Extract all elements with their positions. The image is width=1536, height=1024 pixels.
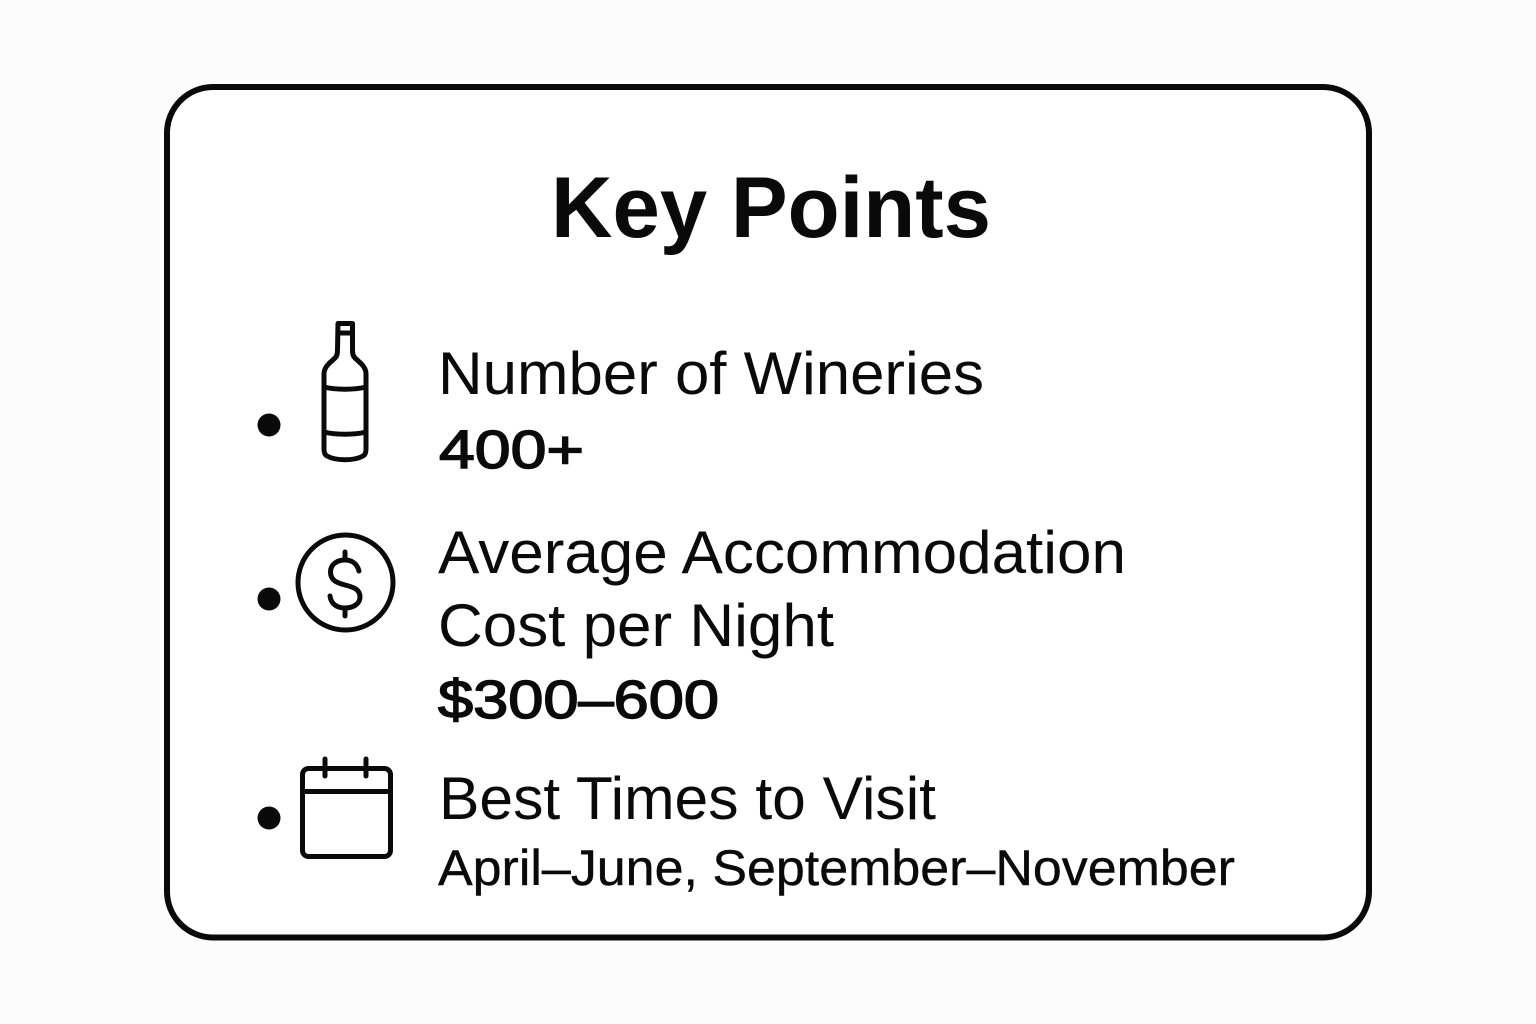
value: 400+: 400+	[439, 420, 584, 480]
item: accommodation cost	[258, 519, 1126, 730]
bullet: cost	[258, 588, 280, 610]
bullet: best times	[258, 806, 280, 830]
label: best times to visit: Best Times to Visit	[439, 765, 936, 832]
item: accommodation cost: Cost per Night	[438, 592, 834, 659]
icon: calendar	[302, 759, 390, 856]
label: number of wineries: Number of Wineries	[438, 340, 984, 407]
icon: wine bottle	[324, 324, 366, 460]
panel: key points card	[167, 87, 1369, 938]
label: average accommodation cost: Average Accommodation	[438, 519, 1126, 586]
icon: dollar coin	[298, 535, 393, 630]
value: months: April–June, September–November	[438, 840, 1235, 896]
item: number of wineries	[258, 324, 984, 480]
bullet: wineries	[258, 414, 280, 436]
value: price range: $300–600	[438, 670, 719, 730]
title: Key Points	[551, 160, 991, 256]
item: best times to visit	[258, 759, 1235, 896]
